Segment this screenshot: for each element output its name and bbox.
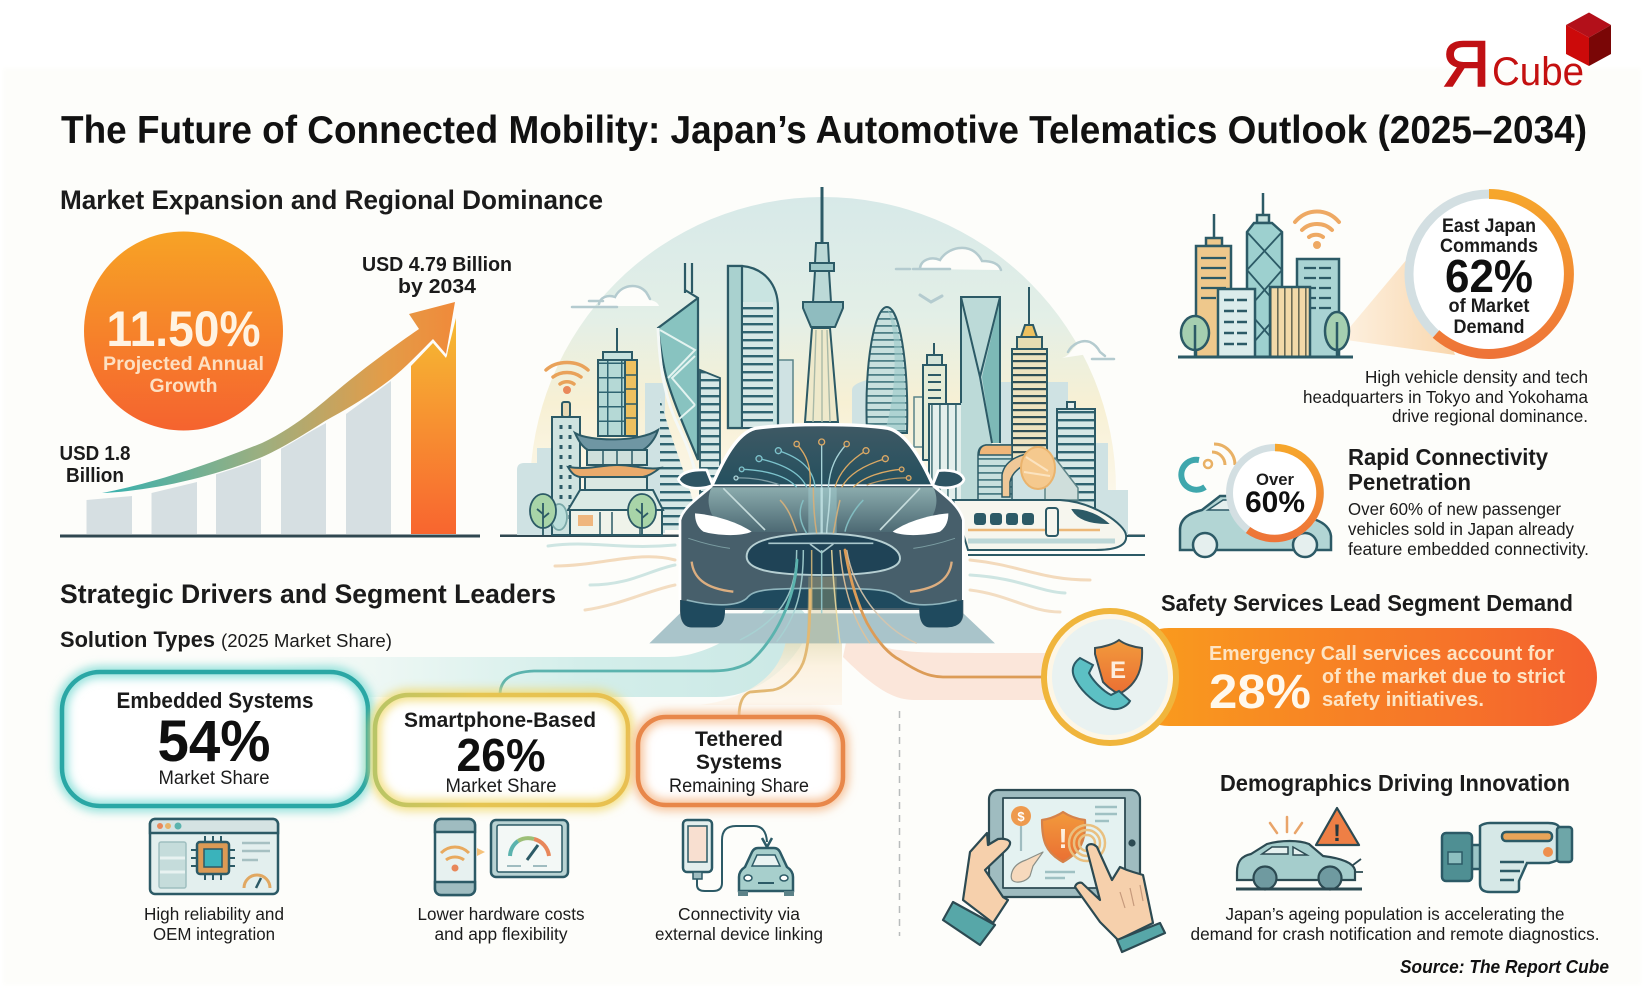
left hand: [963, 833, 1010, 923]
text: demographics: demand for crash notification and remote diagnostics.: [1190, 924, 1600, 944]
label: end value: by 2034: [398, 276, 477, 298]
card: smartphone based: 26%: [456, 729, 546, 781]
building far left: [552, 402, 580, 535]
callout text: [1209, 643, 1565, 719]
captions: solution types: Connectivity via: [678, 904, 800, 924]
orange roof building: [978, 445, 1012, 500]
bar chart: [60, 318, 480, 538]
card: tethered systems: Remaining Share: [669, 776, 809, 797]
gherkin tower: [867, 307, 907, 433]
wifi icon: [546, 362, 588, 393]
card: embedded systems: Market Share: [158, 768, 270, 789]
robot arm: [1002, 447, 1078, 500]
trees: [530, 494, 656, 535]
grille: [747, 533, 900, 575]
subheading: solution types: (2025 Market Share): [221, 631, 392, 651]
text: rapid connectivity: vehicles sold in Japan already: [1348, 519, 1574, 539]
icon: diagnostic device: [1442, 823, 1572, 892]
captions: solution types: external device linking: [655, 924, 823, 944]
donut: 62 percent: East Japan: [1442, 216, 1536, 237]
subheading: solution types: Solution Types: [60, 627, 215, 652]
text: regional dominance: headquarters in Tokyo and Yokohama: [1303, 387, 1588, 407]
illustration: connected car: [649, 425, 995, 643]
panel: growth chart: [60, 232, 512, 538]
callout text: of the market due to strict: [1322, 666, 1565, 688]
captions: solution types: [144, 904, 823, 944]
right hand: [1075, 844, 1153, 940]
panel: safety callout: [1044, 611, 1597, 743]
panel: east japan: [1178, 193, 1588, 426]
heading: market expansion: Market Expansion and Regional Dominance: [60, 185, 603, 215]
heading: demographics: Demographics Driving Innovation: [1220, 770, 1570, 796]
side streaks: [548, 544, 1090, 612]
donut: 60 percent: Over: [1256, 470, 1294, 489]
text: demographics: Japan’s ageing population is accelerating the: [1226, 904, 1564, 924]
donut: 62 percent: Demand: [1454, 317, 1524, 338]
text: regional dominance: [1303, 367, 1588, 426]
building teal yellow: [598, 328, 637, 436]
subheading: solution types: [60, 627, 392, 652]
flow ribbons from car: [250, 544, 1090, 705]
skytree tower: [803, 187, 843, 422]
pagoda: [568, 430, 663, 535]
captions: solution types: Lower hardware costs: [418, 904, 585, 924]
donut: 60 percent: [1230, 448, 1320, 538]
text: demographics: [1190, 904, 1600, 944]
label: start value: USD 1.8: [60, 443, 130, 465]
card: tethered systems: Tethered: [695, 728, 783, 751]
text: rapid connectivity: Rapid Connectivity: [1348, 444, 1548, 470]
card: smartphone based: Smartphone-Based: [404, 709, 596, 732]
text: rapid connectivity: Penetration: [1348, 469, 1471, 495]
icon: city cluster: [1178, 193, 1455, 357]
growth arrow: [102, 302, 455, 493]
card: embedded systems: [62, 672, 368, 806]
donut: 62 percent: of Market: [1448, 296, 1530, 317]
source note: Source: The Report Cube: [1400, 957, 1609, 977]
title: The Future of Connected Mobility: Japan’s Automotive Telematics Outlook (2025–2034): [61, 109, 1587, 152]
text: rapid connectivity: [1348, 444, 1589, 559]
illustration: tablet and hands: [943, 790, 1165, 952]
text: rapid connectivity: Over 60% of new passenger: [1348, 499, 1561, 519]
windshield wires: [734, 439, 911, 487]
illustration: city skyline: [500, 187, 1145, 555]
headlights: [695, 513, 752, 535]
donut: 62 percent: Commands: [1440, 236, 1538, 257]
background buildings pale: [517, 360, 1128, 535]
label: start value: [60, 443, 130, 487]
icon: phone and gauge: [435, 819, 568, 895]
bullet train: [953, 500, 1145, 555]
icon circle: [1044, 611, 1176, 743]
icon: crash car: [1236, 808, 1363, 890]
panel: connectivity penetration: [1180, 444, 1589, 559]
donut: 62 percent: [1409, 194, 1569, 354]
illustration: tablet and hands: !: [1058, 823, 1068, 854]
icon: embedded dashboard: [150, 819, 278, 894]
callout text: safety initiatives.: [1322, 689, 1484, 711]
card: smartphone based: [375, 695, 628, 805]
icon circle: E: [1110, 657, 1126, 684]
icon: connected car: [1180, 444, 1331, 557]
captions: solution types: High reliability and: [144, 904, 284, 924]
label: start value: Billion: [66, 465, 124, 487]
callout text: 28%: [1209, 666, 1311, 719]
heading: strategic drivers: Strategic Drivers and Segment Leaders: [60, 579, 556, 609]
crystal tower: [658, 263, 720, 530]
card: smartphone based: Market Share: [446, 776, 556, 797]
card: embedded systems: Embedded Systems: [116, 688, 314, 713]
growth circle: 11.50%: [106, 301, 260, 357]
card: tethered systems: Systems: [696, 751, 782, 774]
growth circle: Projected Annual: [103, 354, 264, 375]
label: end value: USD 4.79 Billion: [362, 254, 512, 276]
text: regional dominance: High vehicle density and tech: [1365, 367, 1588, 387]
connector wires: [500, 550, 1047, 717]
growth circle: [84, 232, 283, 430]
icon: crash car: !: [1333, 820, 1341, 847]
hood: [709, 487, 936, 532]
growth circle: Growth: [150, 376, 218, 397]
label: end value: [362, 254, 512, 298]
icon: tethered phone and car: [683, 820, 794, 896]
text: rapid connectivity: feature embedded connectivity.: [1348, 539, 1589, 559]
tall rounded tower: [728, 266, 778, 428]
card: tethered systems: [638, 717, 843, 805]
illustration: tablet and hands: $: [1017, 809, 1025, 824]
captions: solution types: and app flexibility: [434, 924, 568, 944]
donut: 60 percent: 60%: [1245, 486, 1305, 519]
card: embedded systems: 54%: [158, 709, 270, 774]
donut: 62 percent: 62%: [1445, 250, 1533, 302]
heading: safety services: Safety Services Lead Segment Demand: [1161, 590, 1573, 616]
text: regional dominance: drive regional dominance.: [1392, 406, 1588, 426]
middle buildings: [923, 287, 1095, 535]
orange pill: [1120, 628, 1597, 726]
logo: RCube: Cube: [1492, 50, 1584, 94]
logo: RCube: [1442, 12, 1611, 100]
center wires: [740, 487, 917, 643]
clouds: [572, 248, 1114, 359]
callout text: Emergency Call services account for: [1209, 643, 1554, 665]
captions: solution types: OEM integration: [153, 924, 275, 944]
logo: RCube: Я: [1442, 27, 1490, 100]
